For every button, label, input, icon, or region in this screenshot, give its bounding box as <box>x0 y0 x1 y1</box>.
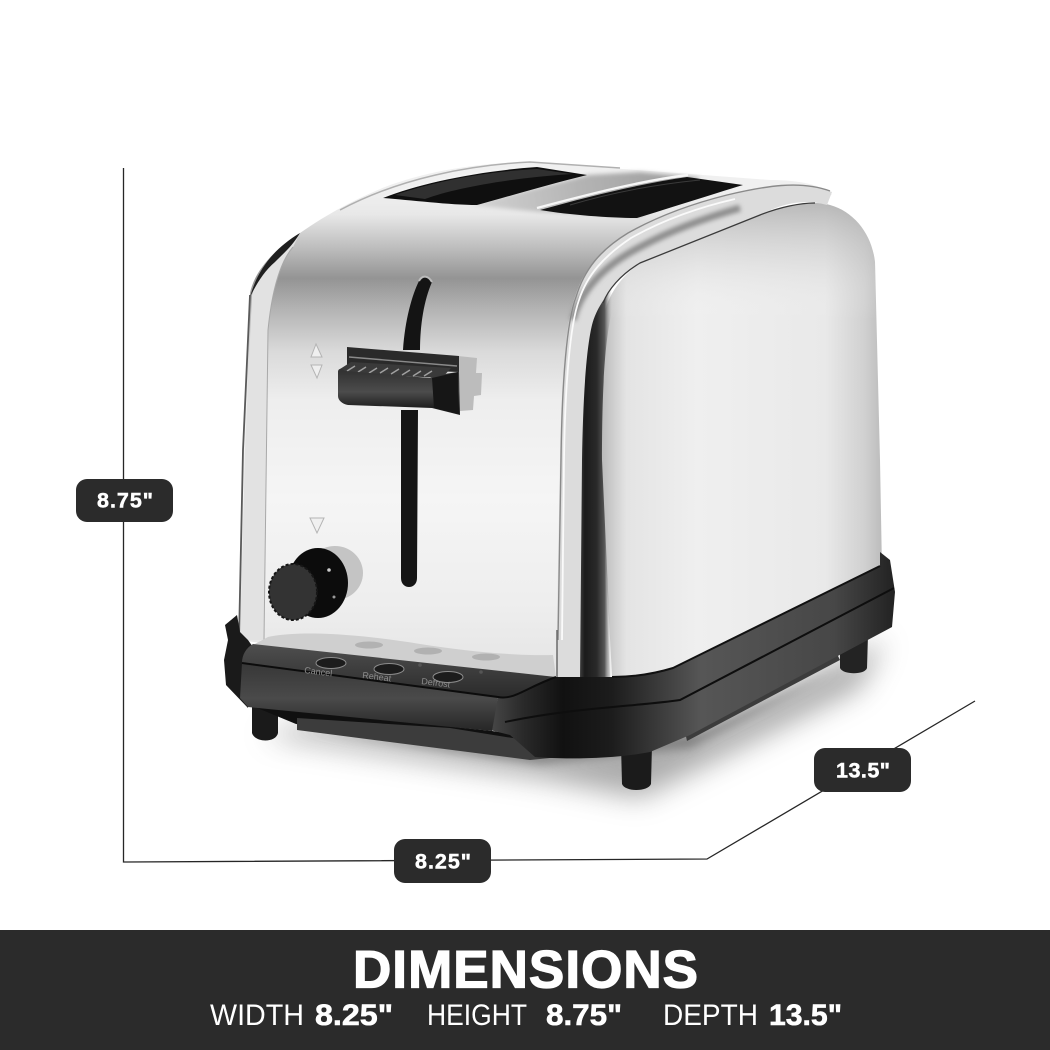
button reflections <box>355 642 500 660</box>
top plate between slots <box>470 172 700 216</box>
depth spec <box>663 999 842 1032</box>
footer band <box>0 930 1050 1050</box>
base underside <box>250 705 570 752</box>
defrost button <box>421 672 463 690</box>
right front foot <box>621 745 652 790</box>
reflection on chrome bottom <box>253 633 556 677</box>
chrome rim between front and side <box>556 185 832 680</box>
width spec: WIDTH <box>210 999 304 1032</box>
width label <box>394 839 491 883</box>
left foot <box>252 705 278 740</box>
depth label: 13.5" <box>836 758 890 782</box>
cancel button: Cancel <box>304 665 333 678</box>
control panel <box>242 644 556 697</box>
side tray flap <box>685 650 840 741</box>
dark rim band <box>580 275 625 680</box>
height spec <box>427 999 622 1032</box>
front face and top <box>238 162 832 680</box>
cancel button <box>304 658 346 678</box>
width spec <box>210 999 393 1032</box>
floor shadow <box>262 640 885 798</box>
defrost button: Defrost <box>421 676 451 690</box>
width spec: 8.25" <box>315 999 393 1032</box>
base front <box>240 663 498 731</box>
height label: 8.75" <box>97 488 153 512</box>
heading: DIMENSIONS <box>353 940 698 1000</box>
timer dial arrow <box>310 518 324 533</box>
toast slot left <box>340 162 620 210</box>
side panel <box>600 203 882 677</box>
crumb tray <box>297 718 575 760</box>
rim shading <box>573 208 740 320</box>
width label: 8.25" <box>415 850 471 874</box>
depth label <box>814 748 911 792</box>
lever handle <box>338 347 482 415</box>
up and down arrows <box>311 344 322 378</box>
height spec: 8.75" <box>546 999 622 1032</box>
left chrome strip <box>239 233 300 640</box>
height spec: HEIGHT <box>427 999 527 1032</box>
lever slot <box>401 277 432 587</box>
base left end <box>224 615 255 708</box>
base right side <box>490 552 895 758</box>
reheat button: Reheat <box>362 670 392 684</box>
depth spec: 13.5" <box>769 999 842 1032</box>
rear foot <box>840 635 868 673</box>
vertical and bottom dimension lines <box>124 168 975 862</box>
reheat button <box>362 664 404 684</box>
rim outer edge <box>558 185 830 640</box>
toast slot right <box>537 175 743 218</box>
toaster illustration <box>224 162 895 798</box>
browning dial <box>269 546 363 620</box>
depth spec: DEPTH <box>663 999 758 1032</box>
height label <box>76 479 173 522</box>
